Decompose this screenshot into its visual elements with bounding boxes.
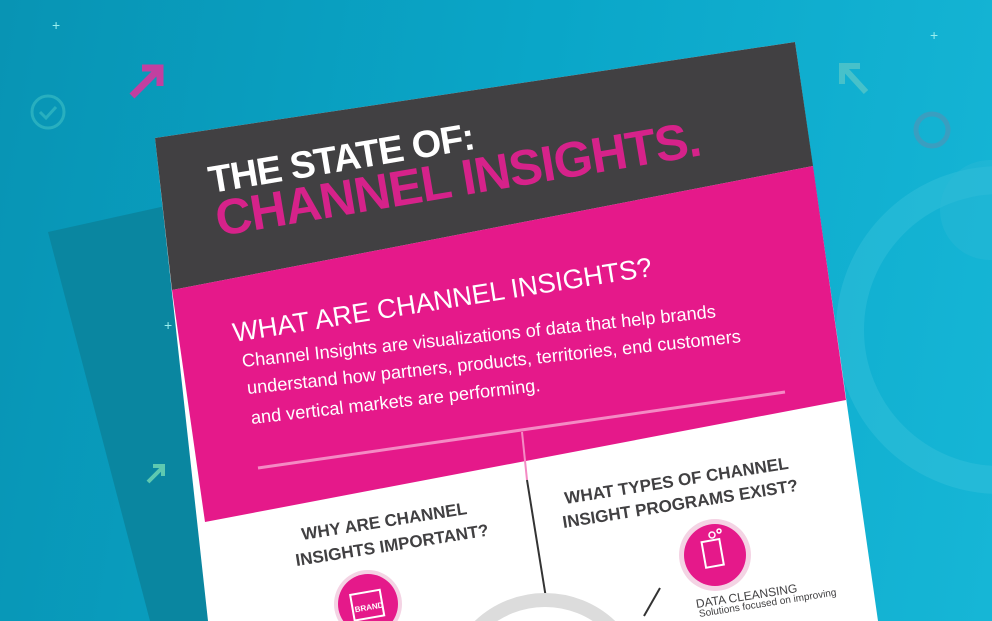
text: Solutions focused on improving <box>698 587 837 620</box>
text: understand how partners, products, territories, end customers <box>246 326 742 398</box>
document: pink section <box>172 166 846 522</box>
icon: arrow right top <box>842 66 866 92</box>
icon: data cleansing <box>679 519 751 591</box>
icon: check circle left <box>32 96 64 128</box>
data cleansing text: DATA CLEANSING <box>695 581 798 611</box>
heading: what are: WHAT ARE CHANNEL INSIGHTS? <box>230 252 654 348</box>
icon: check circle right <box>916 114 948 146</box>
document: white base <box>155 42 878 621</box>
title: THE STATE OF: <box>205 116 477 202</box>
big gray ring <box>450 600 640 621</box>
text: and vertical markets are performing. <box>250 375 541 428</box>
document: dark header <box>155 42 813 290</box>
heading: why: WHY ARE CHANNEL <box>300 499 468 544</box>
icon: pink arrow <box>132 68 160 96</box>
heading: types: WHAT TYPES OF CHANNEL <box>563 454 790 508</box>
back panel <box>48 205 230 621</box>
decorative circles right <box>850 180 992 480</box>
icon: brand briefcase: BRAND <box>354 600 384 614</box>
background decorations: + <box>930 27 938 43</box>
divider line <box>258 392 785 468</box>
paragraph: Channel Insights are visualizations of data that help brands <box>241 301 717 371</box>
text: INSIGHTS IMPORTANT? <box>294 521 490 570</box>
text: INSIGHT PROGRAMS EXIST? <box>561 476 799 532</box>
background decorations: + <box>52 17 60 33</box>
text: CHANNEL INSIGHTS. <box>211 111 704 247</box>
icon: small arrow <box>148 466 163 482</box>
icon: brand briefcase <box>334 570 402 621</box>
background decorations: + <box>164 317 172 333</box>
